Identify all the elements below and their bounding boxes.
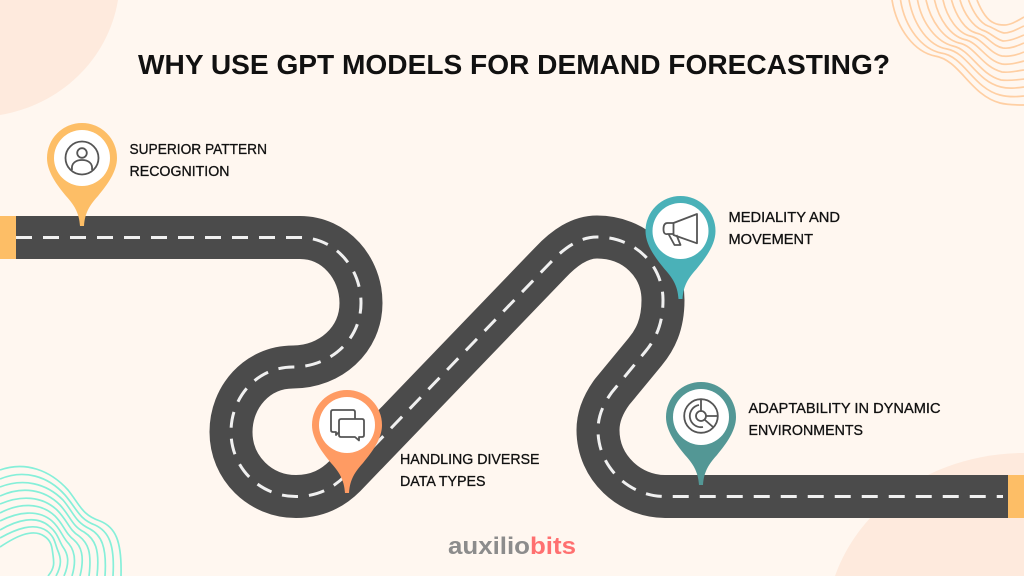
- label: handling diverse data types: HANDLING DIVERSE: [400, 452, 540, 468]
- label: mediality and movement: MEDIALITY AND: [728, 210, 840, 226]
- road end marker: [1008, 475, 1024, 518]
- background blob: top left: [0, 0, 118, 115]
- road centre dashes: [16, 237, 1003, 496]
- label: handling diverse data types: DATA TYPES: [400, 474, 486, 490]
- label: adaptability in dynamic environments: [748, 401, 940, 439]
- contour lines: top right: [892, 0, 1024, 105]
- icon: person: [66, 142, 98, 174]
- pin 1: superior pattern recognition: [47, 123, 117, 226]
- logo: auxiliobits: auxiliobits: [448, 533, 576, 560]
- contour lines: bottom left: [0, 467, 121, 576]
- icon: megaphone: [664, 214, 697, 245]
- label: mediality and movement: [728, 210, 840, 248]
- icon: donut chart: [684, 399, 718, 433]
- title: WHY USE GPT MODELS FOR DEMAND FORECASTING?: [138, 49, 890, 80]
- road start marker: [0, 216, 16, 259]
- label: superior pattern recognition: RECOGNITION: [130, 164, 230, 180]
- winding road: [16, 237, 1008, 496]
- icon: chat bubbles: [331, 410, 364, 440]
- label: adaptability in dynamic environments: ADAPTABILITY IN DYNAMIC: [748, 401, 940, 417]
- label: handling diverse data types: [400, 452, 540, 490]
- background blob: bottom right: [835, 453, 1024, 576]
- pin 4: adaptability in dynamic environments: [666, 382, 736, 485]
- label: adaptability in dynamic environments: ENVIRONMENTS: [748, 423, 863, 439]
- pin 2: handling diverse data types: [312, 390, 382, 493]
- label: superior pattern recognition: [130, 142, 267, 180]
- pin 3: mediality and movement: [646, 196, 716, 299]
- label: superior pattern recognition: SUPERIOR PATTERN: [130, 142, 267, 158]
- label: mediality and movement: MOVEMENT: [728, 232, 813, 248]
